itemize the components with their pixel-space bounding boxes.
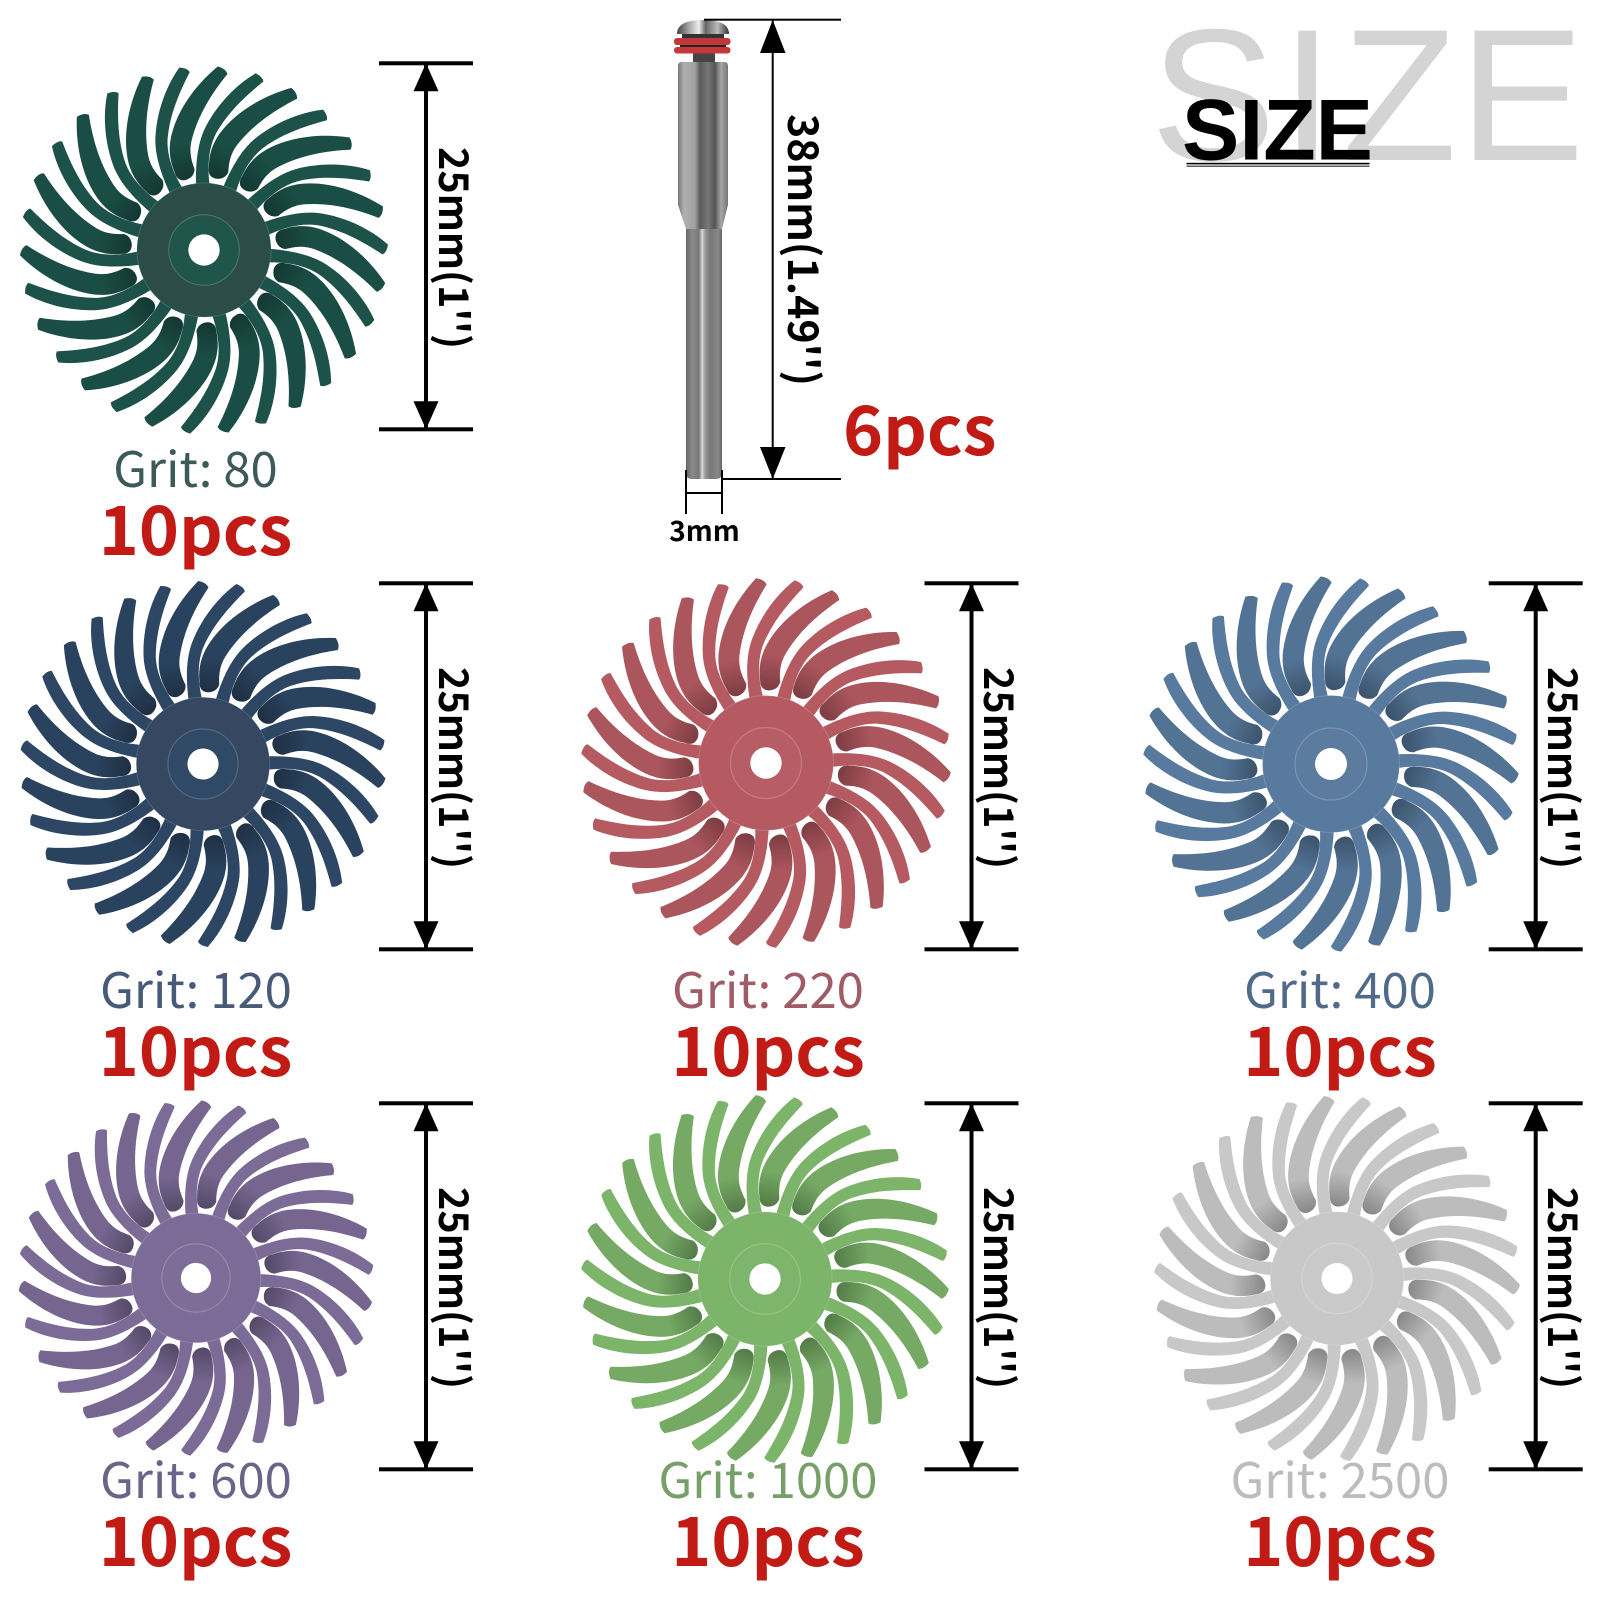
panel: grit 600 wheel: [0, 1074, 487, 1586]
dimension: 25mm: 25mm(1''): [1536, 1187, 1596, 1389]
label: 10pcs: 10pcs: [99, 1487, 292, 1586]
heading: size: [1150, 0, 1584, 200]
label: grit 600: Grit: 600: [100, 1442, 292, 1513]
label: grit 2500: Grit: 2500: [1231, 1442, 1449, 1513]
dimension: 25mm: [379, 581, 487, 951]
dimension: 3mm: [669, 470, 740, 550]
label: 6pcs: 6pcs: [843, 376, 996, 475]
panel: grit 80 wheel: [0, 32, 487, 575]
dimension: 25mm: 25mm(1''): [972, 667, 1032, 869]
wheel: grit 2500: [1144, 1088, 1528, 1472]
dimension: 25mm: [1489, 581, 1596, 951]
label: grit 120: Grit: 120: [100, 952, 292, 1023]
label: 10pcs: 10pcs: [671, 997, 865, 1096]
label: 10pcs: 10pcs: [1243, 1487, 1437, 1586]
panel: mandrel: [669, 19, 996, 550]
dimension: 38mm: [704, 19, 841, 480]
dimension: 38mm: 38mm(1.49''): [775, 114, 836, 386]
label: grit 400: Grit: 400: [1244, 952, 1436, 1023]
label: 10pcs: 10pcs: [99, 997, 292, 1096]
dimension: 25mm: [924, 581, 1032, 951]
wheel: grit 220: [567, 567, 963, 962]
label: 10pcs: 10pcs: [671, 1487, 865, 1586]
icon: mandrel shaft with screw and red discs: [674, 20, 730, 479]
dimension: 25mm: [379, 1101, 487, 1471]
label: grit 80: Grit: 80: [113, 431, 278, 502]
panel: grit 400 wheel: [1129, 565, 1596, 1096]
dimension: 25mm: 25mm(1''): [427, 1187, 487, 1389]
panel: grit 120 wheel: [1, 565, 487, 1096]
dimension: 25mm: 25mm(1''): [427, 667, 487, 869]
title: size: SIZE: [1182, 82, 1373, 178]
wheel: grit 600: [0, 1074, 400, 1484]
dimension: 25mm: 25mm(1''): [972, 1187, 1032, 1389]
dimension: 25mm: [1489, 1101, 1596, 1471]
dimension: 25mm: [924, 1101, 1032, 1471]
wheel: grit 400: [1129, 565, 1531, 966]
label: 10pcs: 10pcs: [1243, 997, 1437, 1096]
wheel: grit 1000: [567, 1083, 961, 1477]
dimension: 3mm: 3mm: [669, 510, 740, 550]
panel: grit 1000 wheel: [567, 1083, 1032, 1586]
label: grit 1000: Grit: 1000: [659, 1442, 877, 1513]
dimension: 25mm: 25mm(1''): [427, 147, 487, 349]
panel: grit 220 wheel: [567, 567, 1032, 1096]
dimension: 25mm: 25mm(1''): [1536, 667, 1596, 869]
wheel: grit 120: [1, 565, 403, 966]
label: 10pcs: 10pcs: [99, 476, 292, 575]
label: grit 220: Grit: 220: [672, 952, 864, 1023]
panel: grit 2500 wheel: [1144, 1088, 1596, 1586]
wheel: grit 80: [0, 32, 422, 470]
dimension: 25mm: [379, 61, 487, 431]
